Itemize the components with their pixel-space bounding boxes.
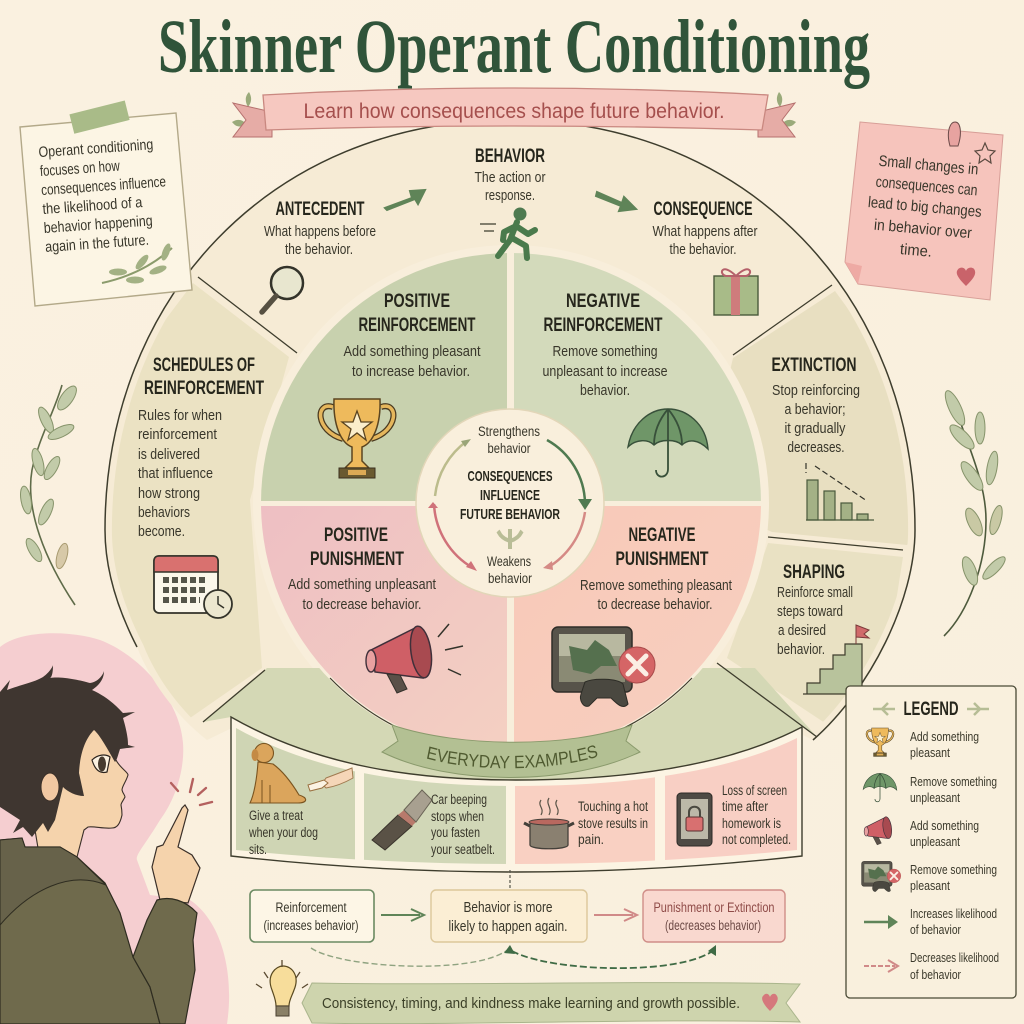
block: positive punishment: PUNISHMENT: [310, 549, 404, 570]
flow box: punishment or extinction: [643, 890, 785, 942]
arrow: decreases: [594, 909, 637, 921]
center circle: Weakens: [487, 554, 531, 569]
icon: screen and controller with cross: [552, 627, 655, 706]
example 3: pot: pain.: [578, 832, 604, 847]
block: negative punishment: to decrease behavior.: [598, 596, 712, 613]
block: schedules of reinforcement: reinforcement: [138, 426, 218, 443]
block: extinction: it gradually: [784, 420, 846, 437]
banner text: Consistency, timing, and kindness make learning and growth possible.: [322, 995, 740, 1012]
block: positive punishment: [288, 525, 463, 693]
example 1: dog: when your dog: [248, 825, 318, 840]
flow box: reinforcement: [250, 890, 374, 942]
icon: magnifier: [262, 267, 303, 312]
flow box: behavior more likely: likely to happen again.: [448, 918, 568, 935]
legend item 1: pleasant: [910, 746, 950, 760]
eye: [92, 755, 110, 772]
icon: umbrella: [628, 409, 708, 477]
example 4: locked tablet: not completed.: [722, 832, 791, 847]
disc lower outline: [330, 678, 692, 755]
icon: trophy: [321, 399, 393, 478]
legend item 4: [862, 861, 997, 893]
block: shaping: steps toward: [777, 603, 843, 620]
character: student pointing: [0, 665, 212, 1024]
block: negative reinforcement: REINFORCEMENT: [544, 315, 663, 336]
disc inner rim: [258, 250, 764, 756]
legend item 6: [864, 951, 999, 982]
center circle: CONSEQUENCES: [468, 468, 552, 485]
block: negative punishment: [552, 525, 733, 706]
block: schedules of reinforcement: Rules for when: [138, 407, 222, 424]
example 4: locked tablet: time after: [722, 799, 768, 814]
arrow: antecedent to behavior: [385, 190, 425, 210]
arrow: behavior to consequence: [596, 192, 636, 211]
example 4: locked tablet: homework is: [722, 816, 781, 831]
block: antecedent: [262, 199, 376, 312]
block: schedules of reinforcement: SCHEDULES OF: [153, 355, 255, 376]
panel: everyday examples: [230, 716, 803, 873]
sprig: [102, 242, 172, 284]
example 1: dog: [248, 744, 353, 857]
block: negative reinforcement: Remove something: [552, 343, 658, 360]
icon: light bulb: [256, 960, 308, 1016]
legend item 5: of behavior: [910, 923, 961, 937]
segment: shaping fill: [727, 543, 903, 727]
legend item 4: Remove something: [910, 863, 997, 877]
example 2: seatbelt: stops when: [431, 809, 484, 824]
ear: [41, 773, 59, 801]
center circle: [416, 409, 604, 597]
flow box: punishment or extinction: (decreases behavior): [665, 918, 761, 933]
hand: [152, 805, 200, 903]
block: negative punishment: NEGATIVE: [628, 525, 696, 546]
legend item 4: pleasant: [910, 879, 950, 893]
banner: everyday examples: [381, 724, 641, 778]
note: definition: [20, 101, 192, 306]
example 1: dog: sits.: [249, 842, 267, 857]
icon: gift: [714, 269, 758, 315]
note text: in behavior over: [873, 217, 972, 242]
legend item 5: Increases likelihood: [910, 907, 997, 921]
everyday band: [203, 668, 817, 780]
block: behavior: [474, 146, 546, 258]
example 1: dog: Give a treat: [249, 808, 303, 823]
example 3: pot: Touching a hot: [578, 799, 648, 814]
center circle: INFLUENCE: [480, 487, 540, 504]
block: shaping: behavior.: [777, 641, 825, 658]
icon: calendar: [154, 556, 232, 618]
jacket: [0, 838, 160, 1024]
block: behavior: response.: [485, 187, 535, 204]
heart: [762, 994, 778, 1011]
flow box: behavior more likely: Behavior is more: [464, 899, 552, 916]
block: consequence: What happens after: [652, 223, 758, 240]
center text: Strengthens: [478, 424, 540, 439]
icon: running figure: [480, 208, 535, 258]
panel: legend: [846, 686, 1016, 998]
block: antecedent: What happens before: [264, 223, 376, 240]
note text: consequences influence: [41, 173, 166, 199]
flow box: reinforcement: (increases behavior): [264, 918, 358, 933]
block: negative reinforcement: NEGATIVE: [566, 291, 640, 312]
legend item 2: unpleasant: [910, 791, 960, 805]
block: negative reinforcement: unpleasant to increase: [542, 363, 668, 380]
block: antecedent: ANTECEDENT: [276, 199, 365, 220]
legend item 6: of behavior: [910, 968, 961, 982]
icon: declining bar chart: [806, 463, 874, 520]
block: negative punishment: PUNISHMENT: [616, 549, 709, 570]
block: behavior: The action or: [474, 169, 546, 186]
note text: Operant conditioning: [38, 136, 154, 161]
separators: [198, 277, 903, 550]
note text: Small changes in: [878, 153, 979, 178]
block: positive reinforcement: to increase behavior.: [352, 363, 470, 380]
block: schedules of reinforcement: that influence: [138, 465, 213, 482]
megaphone sound lines: [438, 624, 463, 675]
quadrant: negative reinforcement: [514, 250, 764, 501]
block: positive reinforcement: [321, 291, 481, 478]
block: shaping: a desired: [778, 622, 826, 639]
decorative sprig left: [19, 383, 80, 605]
quadrant: positive punishment: [260, 506, 507, 756]
decorative sprig right: [942, 388, 1008, 636]
note: small changes: [845, 122, 1003, 300]
card 4: [665, 738, 797, 860]
banner: everyday examples: EVERYDAY EXAMPLES: [427, 745, 598, 768]
block: shaping: [777, 562, 869, 694]
legend item 1: Add something: [910, 730, 979, 744]
legend item 6: Decreases likelihood: [910, 951, 999, 965]
example 2: seatbelt: your seatbelt.: [431, 842, 495, 857]
block: positive punishment: to decrease behavior.: [302, 596, 422, 613]
note text: time.: [899, 241, 933, 261]
legend item 2: [863, 773, 997, 805]
arrow: increases: [381, 909, 424, 921]
example 3: pot: stove results in: [578, 816, 648, 831]
bottom banner: [302, 983, 800, 1024]
pin: [948, 122, 960, 146]
quadrant: negative punishment: [514, 506, 764, 756]
block: schedules of reinforcement: behaviors: [138, 504, 190, 521]
example 4: locked tablet: Loss of screen: [722, 783, 787, 798]
flow box: punishment or extinction: Punishment or Extinction: [654, 900, 774, 915]
block: schedules of reinforcement: [138, 355, 264, 618]
wheel outline: [105, 120, 915, 740]
quadrant: positive reinforcement: [260, 250, 507, 501]
legend item 2: Remove something: [910, 775, 997, 789]
block: schedules of reinforcement: become.: [138, 523, 185, 540]
heart: [957, 268, 975, 286]
main wheel: [90, 120, 935, 740]
flow connector: [509, 870, 511, 888]
subtitle text: Learn how consequences shape future behavior.: [304, 100, 724, 123]
block: positive reinforcement: Add something pleasant: [344, 343, 481, 360]
block: behavior: BEHAVIOR: [475, 146, 545, 167]
inner disc with quadrants: [203, 245, 817, 780]
note text: [38, 135, 170, 256]
note text: the likelihood of a: [42, 194, 143, 218]
segment: extinction fill: [731, 291, 908, 545]
tape: [69, 101, 130, 134]
card 2: [364, 773, 506, 864]
example 3: pot: [524, 798, 648, 849]
spark lines: [171, 779, 212, 805]
block: positive punishment: POSITIVE: [324, 525, 388, 546]
block: positive reinforcement: POSITIVE: [384, 291, 450, 312]
hair: [0, 665, 135, 837]
legend item 3: [864, 816, 979, 849]
curl: [845, 262, 862, 284]
note text: consequences can: [875, 174, 978, 199]
block: positive reinforcement: REINFORCEMENT: [358, 315, 476, 336]
character backdrop: pink watercolor: [0, 633, 229, 1024]
segment: schedules fill: [112, 283, 289, 717]
sleeve: [133, 899, 197, 1024]
legend heading: LEGEND: [904, 699, 958, 720]
block: negative reinforcement: [542, 291, 708, 477]
block: extinction: [772, 355, 874, 520]
cycle arrows: [434, 440, 585, 568]
disc rim: [253, 245, 769, 761]
icon: stairs with flag: [803, 625, 869, 694]
block: extinction: Stop reinforcing: [772, 382, 860, 399]
block: extinction: a behavior;: [784, 401, 846, 418]
block: consequence: [652, 199, 758, 315]
subtitle ribbon: [232, 88, 796, 137]
block: shaping: SHAPING: [783, 562, 845, 583]
block: consequence: the behavior.: [670, 241, 736, 258]
card 3: [515, 777, 655, 864]
legend item 5: [864, 907, 997, 937]
block: extinction: decreases.: [788, 439, 844, 456]
example 2: seatbelt: [372, 790, 495, 857]
legend item 1: [867, 728, 979, 760]
block: schedules of reinforcement: REINFORCEMENT: [144, 378, 264, 399]
block: negative reinforcement: behavior.: [580, 382, 630, 399]
center circle: behavior: [488, 571, 532, 586]
hood: [0, 838, 106, 925]
note text: lead to big changes: [867, 194, 983, 221]
legend item 3: Add something: [910, 819, 979, 833]
block: shaping: Reinforce small: [777, 584, 853, 601]
flow box: behavior more likely: [431, 890, 587, 942]
dashed return arrows: [311, 945, 716, 968]
block: negative punishment: Remove something pleasant: [580, 577, 733, 594]
example 2: seatbelt: Car beeping: [431, 792, 487, 807]
block: consequence: CONSEQUENCE: [654, 199, 752, 220]
note text: again in the future.: [45, 232, 150, 256]
wheel base: [105, 120, 915, 740]
block: extinction: EXTINCTION: [772, 355, 856, 376]
block: schedules of reinforcement: is delivered: [138, 446, 200, 463]
center circle: behavior: [488, 441, 531, 456]
note text: [863, 152, 986, 265]
band separators: [203, 663, 817, 737]
ribbon leaves: [232, 92, 796, 126]
example 2: seatbelt: you fasten: [431, 825, 480, 840]
center circle: FUTURE BEHAVIOR: [460, 506, 560, 523]
star: [975, 143, 995, 163]
example 4: locked tablet: [677, 783, 791, 847]
flow box: reinforcement: Reinforcement: [276, 900, 347, 915]
block: positive punishment: Add something unpleasant: [288, 576, 437, 593]
note text: behavior happening: [43, 212, 153, 237]
face and neck: [30, 725, 128, 860]
legend item 3: unpleasant: [910, 835, 960, 849]
block: schedules of reinforcement: how strong: [138, 485, 200, 502]
icon: megaphone: [366, 625, 435, 693]
block: antecedent: the behavior.: [285, 241, 353, 258]
note text: focuses on how: [39, 158, 120, 180]
card 1: [236, 728, 355, 860]
